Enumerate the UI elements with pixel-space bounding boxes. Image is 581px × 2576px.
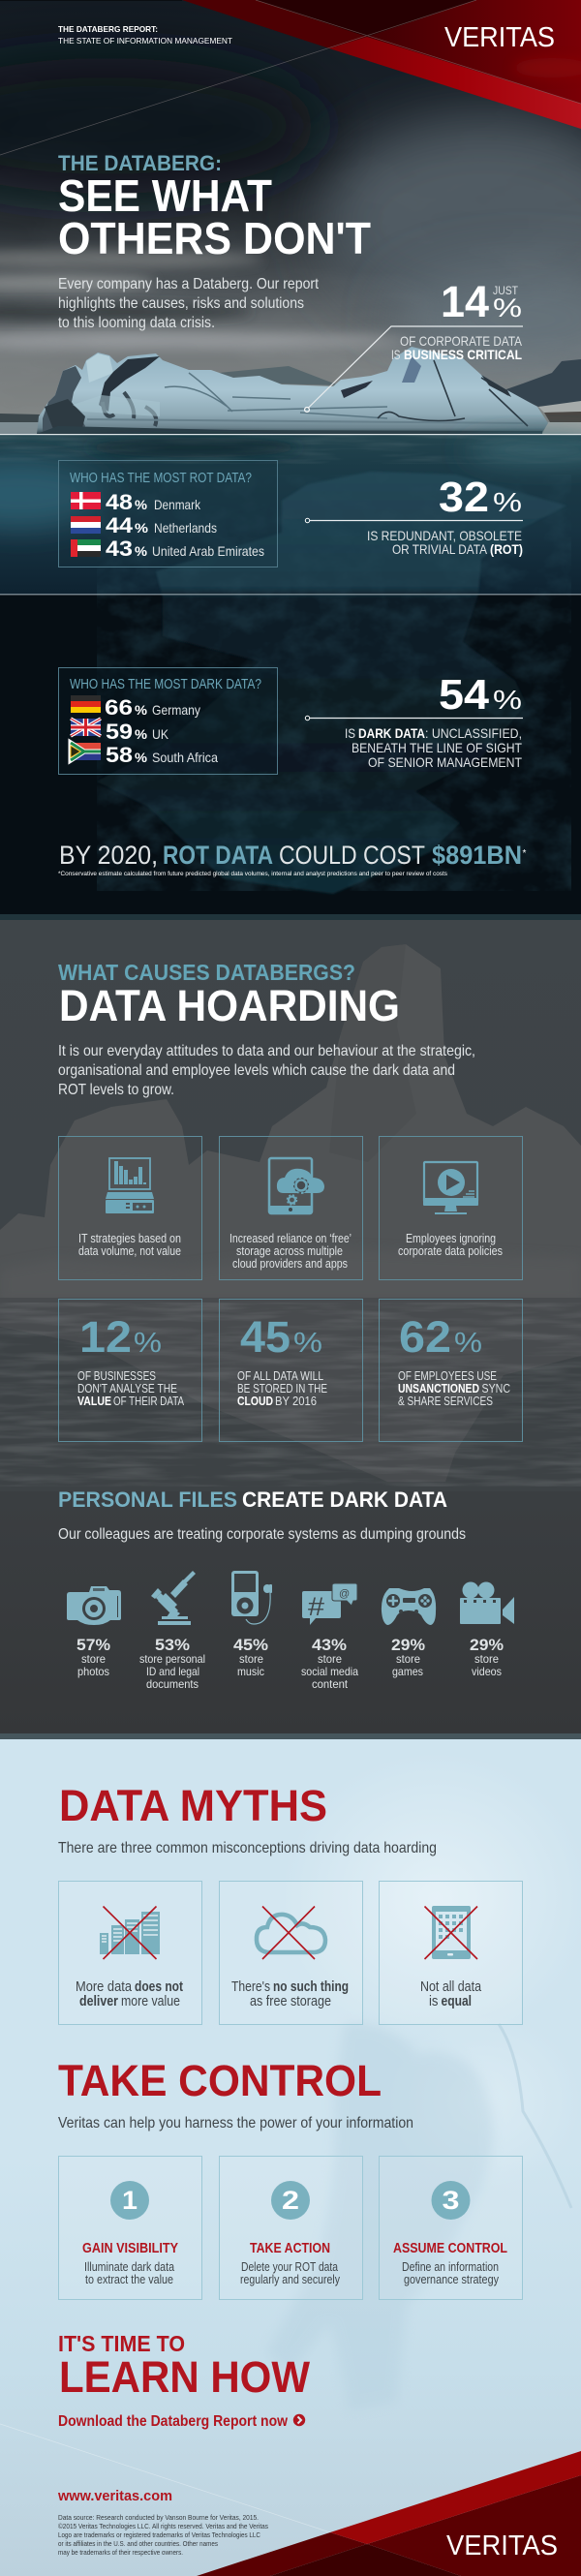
text: assume control: Define an information (402, 2260, 499, 2274)
hoarding paragraph: It is our everyday attitudes to data and our behaviour at the strategic, (58, 1043, 475, 1059)
icon: crossed out cloud (257, 1906, 325, 1959)
stat: 54 percent dark data: OF SENIOR MANAGEMENT (368, 754, 522, 770)
row: Denmark 48% (106, 490, 201, 514)
stat: 14 percent business critical: JUST (493, 286, 518, 297)
stat: 54 percent dark data: 54 (439, 671, 490, 719)
text: misconceptions intro: There are three common misconceptions driving data hoarding (58, 1840, 437, 1856)
decorative red angular banner bottom (0, 2424, 581, 2576)
panel: stat 12 percent (58, 1300, 201, 1441)
row: Germany 66% (105, 695, 200, 720)
panel: assume control (380, 2156, 523, 2299)
text: not equal: Not all data (420, 1979, 482, 1995)
callout: ROT data cost by 2020 (59, 841, 527, 870)
panel: light section background (0, 1739, 581, 2576)
panel: free storage reliance (219, 1137, 362, 1280)
title: what causes databergs (58, 960, 400, 1030)
text: more data: More data (76, 1979, 133, 1995)
stat: 32 percent ROT: (ROT) (490, 541, 523, 557)
legal small print: Data source: Research conducted by Vanson Bourne for Veritas, 2015. (58, 2513, 259, 2522)
text: harness intro: Veritas can help you harness the power of your information (58, 2115, 413, 2131)
heading: it's time to learn how: LEARN HOW (59, 2352, 310, 2402)
row: United Arab Emirates 43%: United Arab Emirates (152, 543, 264, 559)
panel: stat 12 percent: OF THEIR DATA (113, 1394, 184, 1408)
icon: number 1 (110, 2181, 149, 2220)
icon: number 3 (432, 2181, 471, 2220)
text: more data: does not (135, 1979, 183, 1995)
text: employees ignoring policies: corporate data policies (398, 1244, 503, 1258)
stat: 53% personal documents (139, 1636, 205, 1691)
text: free storage reliance: Increased reliance on ‘free’ (229, 1232, 352, 1245)
row: Netherlands 44%: Netherlands (154, 520, 217, 536)
stat: 54 percent dark data: IS (345, 725, 355, 741)
legal small print (58, 2513, 268, 2557)
legal small print: may be trademarks of their respective owners. (58, 2548, 183, 2557)
stat: 14 percent business critical: % (493, 293, 522, 322)
report header text (58, 24, 232, 46)
callout: ROT data cost by 2020: BY 2020, (59, 841, 158, 870)
panel: stat 12 percent: DON'T ANALYSE THE (77, 1381, 177, 1395)
row: UK 59%: UK (152, 726, 169, 742)
stat: 29% videos: store (474, 1652, 499, 1666)
row: Denmark 48%: % (135, 497, 148, 512)
heading: personal files create dark data: CREATE DARK DATA (242, 1487, 447, 1512)
stat: 29% videos: 29% (470, 1636, 504, 1654)
text: take action (240, 2241, 341, 2286)
decorative red angular banner top (0, 0, 581, 155)
panel: stat 45 percent: CLOUD (237, 1394, 273, 1408)
icon: monitor and server (106, 1158, 154, 1213)
stat: 43% social media (301, 1636, 358, 1691)
icon: monitor with play button (423, 1162, 478, 1214)
text: assume control (393, 2241, 507, 2286)
text: free storage: as free storage (250, 1994, 331, 2009)
row: Denmark 48%: Denmark (154, 497, 201, 512)
flag: Germany (71, 695, 101, 713)
row: Netherlands 44%: 44 (106, 513, 134, 537)
stat: 14 percent business critical: OF CORPORATE DATA (400, 333, 523, 349)
stat: 14 percent business critical: IS (391, 347, 401, 362)
row: United Arab Emirates 43%: % (135, 543, 148, 559)
panel: myth free storage (219, 1881, 362, 2024)
title: what causes databergs: DATA HOARDING (59, 981, 400, 1030)
icon: gavel (151, 1571, 196, 1625)
icon: game controller (382, 1588, 436, 1625)
text: free storage: no such thing (273, 1979, 349, 1995)
icon: video camera (460, 1582, 514, 1624)
text: take action: regularly and securely (240, 2273, 341, 2286)
row: South Africa 58% (106, 743, 218, 767)
hoarding paragraph (58, 1043, 475, 1098)
title: data myths: DATA MYTHS (59, 1781, 327, 1830)
callout: ROT data cost by 2020: ROT DATA (163, 841, 273, 870)
footnote: *Conservative estimate calculated from future predicted global data volumes, internal and analyst predictions and peer to peer review of costs (58, 872, 447, 877)
stat: 53% personal documents: ID and legal (146, 1665, 199, 1678)
stat: 54 percent dark data: DARK DATA (358, 725, 425, 741)
website link: www.veritas.com (57, 2488, 172, 2504)
text: employees ignoring policies: Employees ignoring (406, 1232, 496, 1245)
panel: stat 45 percent: % (293, 1328, 322, 1359)
stat: 29% games: store (396, 1652, 420, 1666)
text: not equal: is (429, 1994, 438, 2009)
panel: stat 62 percent: & SHARE SERVICES (398, 1394, 493, 1408)
stat: 43% social media: social media (301, 1665, 358, 1678)
row: South Africa 58%: % (135, 750, 148, 765)
intro paragraph: highlights the causes, risks and solutions (58, 295, 304, 312)
row: Netherlands 44%: % (135, 520, 149, 536)
panel: myth more data (58, 1881, 201, 2024)
panel: myth all data equal (380, 1881, 523, 2024)
stat: 43% social media: content (312, 1677, 349, 1691)
flag: Denmark (71, 492, 101, 509)
call to action: download link: Download the Databerg Report now (58, 2413, 288, 2430)
callout: ROT data cost by 2020: * (523, 848, 527, 859)
heading: it's time to learn how (58, 2331, 310, 2402)
row: Germany 66%: 66 (105, 695, 133, 720)
stat: 32 percent ROT (305, 474, 523, 557)
row: United Arab Emirates 43%: 43 (106, 537, 133, 561)
stat: 54 percent dark data: : UNCLASSIFIED, (425, 725, 522, 741)
panel: stat 45 percent: BE STORED IN THE (237, 1381, 327, 1395)
iceberg above the water (37, 347, 548, 434)
callout: ROT data cost by 2020: $891BN (432, 841, 522, 870)
icon: social media bubbles: @ (339, 1588, 350, 1600)
text: take action: TAKE ACTION (250, 2241, 330, 2256)
panel: stat 62 percent: OF EMPLOYEES USE (398, 1368, 497, 1383)
panel: stat 12 percent: 12 (79, 1312, 132, 1362)
title: the databerg: SEE WHAT (58, 170, 272, 221)
panel: underwater background (0, 434, 581, 920)
icon: crossed out servers (100, 1906, 160, 1959)
intro paragraph: to this looming data crisis. (58, 315, 215, 331)
text: gain visibility (82, 2241, 178, 2286)
text: IT strategies: data volume, not value (78, 1244, 181, 1258)
title: the databerg: OTHERS DON'T (58, 213, 371, 263)
text: free storage reliance (229, 1232, 352, 1271)
intro paragraph (58, 276, 319, 331)
flag: South Africa (71, 743, 101, 760)
panel: take action (219, 2156, 362, 2299)
panel: most ROT data by country: WHO HAS THE MOST ROT DATA? (70, 471, 252, 486)
heading: personal files create dark data (58, 1487, 447, 1512)
stat: 43% social media: 43% (312, 1636, 347, 1654)
heading: it's time to learn how: IT'S TIME TO (58, 2331, 185, 2356)
text: assume control: governance strategy (404, 2273, 500, 2286)
row: Germany 66%: Germany (152, 702, 200, 718)
row: Denmark 48%: 48 (106, 490, 133, 514)
text: colleagues dumping grounds: Our colleagues are treating corporate systems as dumping grounds (58, 1526, 466, 1543)
stat: 45% music (233, 1636, 268, 1678)
panel: stat 62 percent: 62 (399, 1312, 451, 1362)
panel: stat 62 percent (380, 1300, 523, 1441)
panel: stat 45 percent: 45 (240, 1312, 290, 1362)
row: South Africa 58%: South Africa (152, 750, 218, 765)
stat: 29% games: 29% (391, 1636, 425, 1654)
legal small print: Logo are trademarks or registered trademarks of Veritas Technologies LLC (58, 2530, 260, 2539)
callout: ROT data cost by 2020: COULD COST (279, 841, 425, 870)
row: UK 59% (106, 720, 169, 744)
text: free storage: There's (231, 1979, 270, 1995)
stat: 29% games: games (392, 1665, 423, 1678)
title: the databerg (58, 151, 371, 263)
row: South Africa 58%: 58 (106, 743, 133, 767)
stat: 32 percent ROT: OR TRIVIAL DATA (392, 541, 488, 557)
heading: personal files create dark data: PERSONAL FILES (58, 1487, 237, 1512)
row: Germany 66%: % (135, 702, 148, 718)
legal small print: or its affiliates in the U.S. and other countries. Other names (58, 2539, 218, 2548)
panel: stat 62 percent: SYNC (482, 1381, 510, 1395)
panel: stat 12 percent: % (134, 1328, 162, 1359)
panel: most dark data by country (58, 668, 277, 775)
icon: number 2: 2 (282, 2186, 299, 2215)
title: take control: TAKE CONTROL (58, 2056, 382, 2105)
hoarding paragraph: ROT levels to grow. (58, 1082, 174, 1098)
stat: 54 percent dark data (305, 671, 523, 770)
stat: 57% photos: store (81, 1652, 106, 1666)
panel: stat 12 percent: VALUE (77, 1394, 111, 1408)
Veritas logo bottom: VERITAS (446, 2530, 558, 2561)
icon: social media bubbles (302, 1583, 357, 1625)
text: gain visibility: to extract the value (85, 2273, 173, 2286)
text: IT strategies: IT strategies based on (78, 1232, 181, 1245)
stat: 32 percent ROT: % (493, 487, 522, 517)
text: more data (76, 1979, 183, 2009)
stat: 45% music: music (237, 1665, 264, 1678)
stat: 14 percent business critical (305, 277, 523, 412)
text: IT strategies (78, 1232, 181, 1258)
icon: tablet with cloud and gears (269, 1158, 324, 1213)
text: free storage (231, 1979, 349, 2009)
Veritas logo top: VERITAS (444, 22, 555, 53)
panel: hero sky and iceberg (0, 0, 581, 435)
text: not equal: equal (442, 1994, 472, 2009)
panel: stat 45 percent: OF ALL DATA WILL (237, 1368, 323, 1383)
panel: IT strategies (58, 1137, 201, 1280)
stat: 29% videos: videos (472, 1665, 502, 1678)
panel: data hoarding background (0, 920, 581, 1739)
title: the databerg: THE DATABERG: (58, 151, 222, 175)
text: more data: more value (121, 1994, 180, 2009)
icon: number 1: 1 (122, 2186, 138, 2215)
text: gain visibility: Illuminate dark data (84, 2260, 174, 2274)
panel: most ROT data by country (58, 461, 277, 567)
panel: gain visibility (58, 2156, 201, 2299)
stat: 29% videos (470, 1636, 504, 1678)
stat: 45% music: 45% (233, 1636, 268, 1654)
icon: camera (67, 1586, 121, 1625)
panel: stat 12 percent: OF BUSINESSES (77, 1368, 156, 1383)
row: UK 59%: 59 (106, 720, 133, 744)
icon: music player (231, 1571, 272, 1624)
icon: number 3: 3 (442, 2186, 459, 2215)
stat: 14 percent business critical: 14 (441, 277, 489, 326)
text: free storage reliance: cloud providers and apps (232, 1257, 348, 1271)
flag: United Kingdom (71, 719, 101, 736)
stat: 29% games (391, 1636, 425, 1678)
stat: 54 percent dark data: BENEATH THE LINE OF SIGHT (352, 740, 522, 755)
panel: stat 62 percent: UNSANCTIONED (398, 1381, 479, 1395)
row: Netherlands 44% (106, 513, 217, 537)
stat: 53% personal documents: store personal (139, 1652, 205, 1666)
icon: crossed out tablet (424, 1906, 477, 1959)
icon: social media bubbles: # (308, 1592, 324, 1621)
stat: 57% photos: 57% (76, 1636, 110, 1654)
text: assume control: ASSUME CONTROL (393, 2241, 507, 2256)
stat: 45% music: store (239, 1652, 263, 1666)
stat: 32 percent ROT: 32 (439, 474, 489, 521)
stat: 57% photos (76, 1636, 110, 1678)
text: more data: deliver (79, 1994, 118, 2009)
panel: stat 45 percent (219, 1300, 362, 1441)
text: employees ignoring policies (398, 1232, 503, 1258)
text: gain visibility: GAIN VISIBILITY (82, 2241, 178, 2256)
report header text: THE STATE OF INFORMATION MANAGEMENT (58, 36, 232, 46)
decorative distant mountains (0, 359, 581, 434)
report header text: THE DATABERG REPORT: (58, 24, 158, 34)
panel: stat 62 percent: % (454, 1328, 482, 1359)
stat: 57% photos: photos (77, 1665, 109, 1678)
text: not equal (420, 1979, 482, 2009)
stat: 43% social media: store (318, 1652, 342, 1666)
panel: stat 45 percent: BY 2016 (275, 1394, 317, 1408)
legal small print: ©2015 Veritas Technologies LLC. All rights reserved. Veritas and the Veritas (58, 2522, 268, 2530)
row: United Arab Emirates 43% (106, 537, 264, 561)
stat: 14 percent business critical: BUSINESS CRITICAL (404, 347, 522, 362)
panel: employees ignoring policies (380, 1137, 523, 1280)
row: UK 59%: % (135, 726, 148, 742)
flag: United Arab Emirates (71, 539, 101, 557)
stat: 32 percent ROT: IS REDUNDANT, OBSOLETE (367, 528, 522, 543)
panel: most dark data by country: WHO HAS THE MOST DARK DATA? (70, 677, 261, 692)
icon: number 2 (271, 2181, 310, 2220)
hoarding paragraph: organisational and employee levels which cause the dark data and (58, 1062, 455, 1079)
text: free storage reliance: storage across multiple (236, 1244, 343, 1258)
intro paragraph: Every company has a Databerg. Our report (58, 276, 319, 292)
text: take action: Delete your ROT data (241, 2260, 338, 2274)
stat: 54 percent dark data: % (493, 685, 522, 715)
title: what causes databergs: WHAT CAUSES DATABERGS? (58, 960, 355, 985)
stat: 53% personal documents: 53% (155, 1636, 190, 1654)
flag: Netherlands (71, 516, 101, 534)
stat: 53% personal documents: documents (146, 1677, 199, 1691)
